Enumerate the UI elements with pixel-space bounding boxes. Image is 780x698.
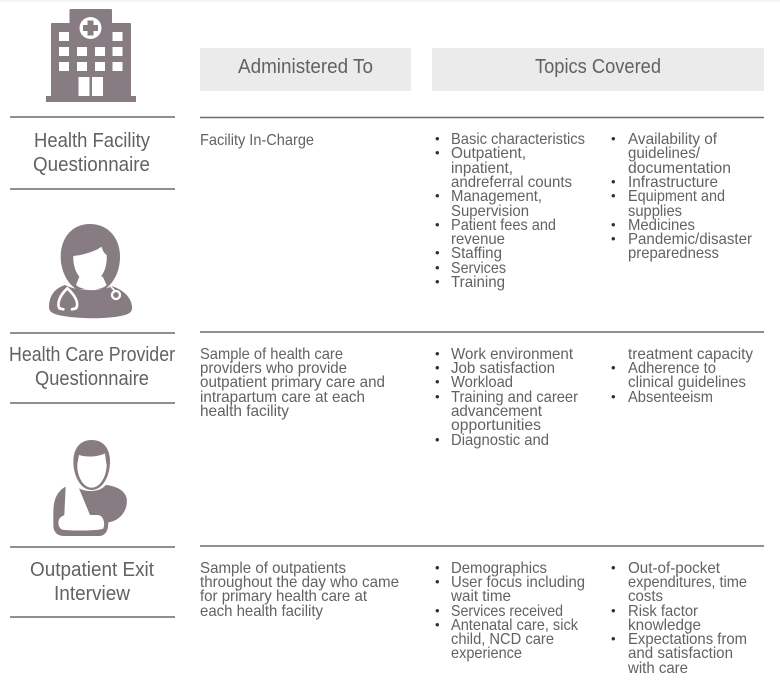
list: outpatient topics column 1: • [435,617,440,632]
row dividers: left column [10,117,175,617]
list: provider topics column 1: • [435,346,440,361]
list: facility topics column 1: • [435,245,440,260]
heading: Health Facility Questionnaire: Health Facility [34,130,150,152]
list: facility topics column 1: andreferral counts [451,174,572,191]
icon: hospital building [46,9,136,102]
list: facility topics column 1: Services [451,260,506,277]
list: outpatient topics column 1: Services received [451,603,563,620]
list: outpatient topics column 2: expenditures, time [628,574,747,591]
list: outpatient topics column 2: • [611,631,616,646]
text: provider administered to: intrapartum care at each [200,389,365,406]
list: facility topics column 1: • [435,131,440,146]
icon: patient with arm sling [53,440,127,536]
header: Topics Covered: Topics Covered [535,56,661,78]
text: outpatient administered to: for primary health care at [200,588,368,605]
list: outpatient topics column 2: Expectations from [628,631,747,648]
list: outpatient topics column 1: child, NCD care [451,631,554,648]
list: provider topics column 1: Diagnostic and [451,432,549,449]
list: provider topics column 2: treatment capacity [628,346,753,363]
list: facility topics column 1: inpatient, [451,160,513,177]
heading: Health Care Provider Questionnaire: Questionnaire [35,368,149,390]
list: provider topics column 1: Job satisfaction [451,360,555,377]
list: facility topics column 2: • [611,231,616,246]
list: provider topics column 1: • [435,374,440,389]
list: outpatient topics column 2: and satisfaction [628,645,733,662]
list: provider topics column 1: Workload [451,374,513,391]
list: facility topics column 2: Availability of [628,131,718,148]
list: outpatient topics column 1: wait time [450,588,511,605]
list: outpatient topics column 2: • [611,560,616,575]
list: facility topics column 1: Staffing [451,245,502,262]
list: outpatient topics column 1: Antenatal care, sick [451,617,579,634]
list: facility topics column 2: • [611,217,616,232]
list: provider topics column 1: advancement [451,403,543,420]
heading: Outpatient Exit Interview: Interview [54,583,131,605]
list: outpatient topics column 2: Risk factor [628,603,699,620]
list: provider topics column 1: Work environment [451,346,574,363]
text: outpatient administered to: Sample of outpatients [200,560,346,577]
list: provider topics column 1: • [435,432,440,447]
heading: Health Facility Questionnaire [33,130,150,176]
list: facility topics column 1: • [435,217,440,232]
icon: female health care provider [49,224,132,318]
heading: Outpatient Exit Interview: Outpatient Exit [30,559,154,581]
text: outpatient administered to: throughout the day who came [200,574,399,591]
list: facility topics column 2: preparedness [628,245,719,262]
list: facility topics column 1: Basic characteristics [451,131,585,148]
list: facility topics column 1: Patient fees and [451,217,556,234]
header: Topics Covered [432,48,764,91]
list: provider topics column 1: Training and career [451,389,579,406]
text: provider administered to: providers who provide [200,360,347,377]
list: outpatient topics column 1: • [435,603,440,618]
heading: Health Care Provider Questionnaire [9,344,175,390]
list: outpatient topics column 1: • [435,560,440,575]
list: provider topics column 2 [611,346,753,406]
list: facility topics column 1: Management, [451,188,542,205]
list: facility topics column 1: Outpatient, [451,145,526,162]
list: facility topics column 2: guidelines/ [628,145,701,162]
list: outpatient topics column 2: • [611,603,616,618]
text: facility administered to: Facility In-Charge [200,132,314,149]
row dividers: table [200,118,764,546]
list: facility topics column 1: revenue [451,231,505,248]
list: outpatient topics column 2: Out-of-pocket [628,560,721,577]
text: provider administered to: outpatient primary care and [200,374,385,391]
list: facility topics column 1: Training [451,274,505,291]
header: Administered To: Administered To [238,56,373,78]
list: facility topics column 1: • [435,274,440,289]
list: outpatient topics column 1: User focus including [451,574,585,591]
list: facility topics column 2: • [611,131,616,146]
list: facility topics column 1: • [435,145,440,160]
heading: Health Care Provider Questionnaire: Health Care Provider [9,344,175,366]
list: outpatient topics column 2: costs [628,588,663,605]
text: provider administered to: Sample of health care [200,346,343,363]
list: facility topics column 2 [611,131,753,262]
list: facility topics column 2: documentation [628,160,731,177]
list: facility topics column 2: • [611,188,616,203]
list: provider topics column 2: clinical guidelines [628,374,746,391]
heading: Outpatient Exit Interview [30,559,154,605]
header: Administered To [200,48,411,91]
list: provider topics column 1: • [435,389,440,404]
text: provider administered to [200,346,385,420]
list: outpatient topics column 1: • [435,574,440,589]
list: facility topics column 1: • [435,188,440,203]
list: outpatient topics column 1: Demographics [451,560,547,577]
list: facility topics column 1 [435,131,585,291]
list: outpatient topics column 1 [435,560,585,662]
list: provider topics column 1 [435,346,579,449]
list: provider topics column 2: • [611,389,616,404]
text: outpatient administered to [200,560,399,620]
list: outpatient topics column 2: with care [627,660,688,677]
list: provider topics column 1: • [435,360,440,375]
list: outpatient topics column 2 [611,560,747,677]
list: facility topics column 2: • [611,174,616,189]
list: facility topics column 2: supplies [628,203,682,220]
list: outpatient topics column 1: experience [451,645,522,662]
list: provider topics column 2: Adherence to [628,360,716,377]
list: facility topics column 2: Medicines [628,217,695,234]
heading: Health Facility Questionnaire: Questionnaire [33,154,150,176]
list: facility topics column 1: • [435,260,440,275]
text: outpatient administered to: each health facility [200,603,323,620]
text: provider administered to: health facility [200,403,289,420]
list: facility topics column 2: Pandemic/disaster [628,231,753,248]
list: facility topics column 2: Infrastructure [628,174,718,191]
list: provider topics column 2: • [611,360,616,375]
list: facility topics column 2: Equipment and [628,188,725,205]
list: facility topics column 1: Supervision [451,203,529,220]
list: provider topics column 1: opportunities [451,417,541,434]
list: provider topics column 2: Absenteeism [628,389,713,406]
list: outpatient topics column 2: knowledge [628,617,701,634]
